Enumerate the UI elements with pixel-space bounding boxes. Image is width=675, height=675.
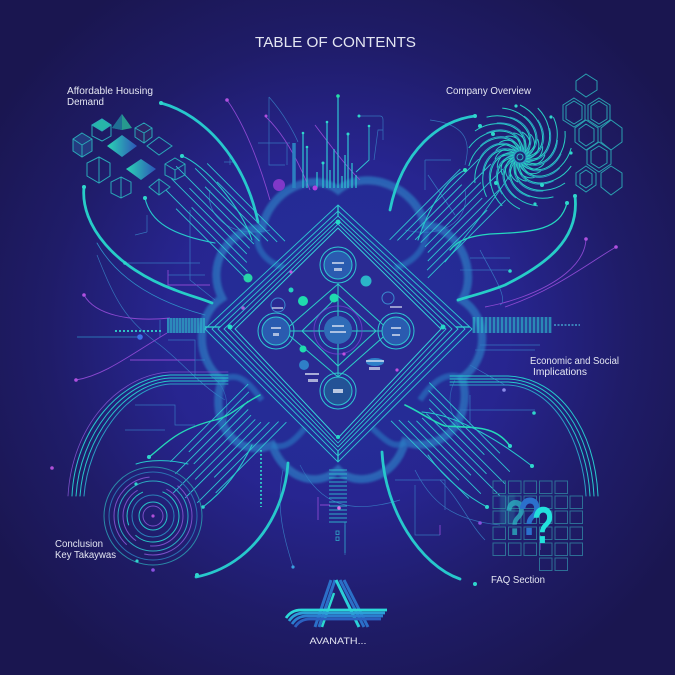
title: TABLE OF CONTENTS: [255, 34, 416, 51]
icon: faq grid with question marks: ?: [518, 486, 542, 546]
curved arms: top left: [84, 103, 258, 315]
stripes: bottom: [261, 450, 347, 553]
fine circuit lines: [97, 97, 540, 567]
text: economic and social implications: Economic and Social: [530, 356, 619, 367]
node: centre: [314, 306, 362, 354]
barcode: left: [77, 318, 205, 340]
barcode: right: [472, 317, 580, 333]
curved arms: bottom left: [68, 372, 288, 577]
text: economic and social implications: [530, 356, 619, 378]
node: left: [258, 313, 294, 349]
text: company overview: Company Overview: [446, 86, 532, 97]
icon: spiral: [464, 100, 576, 214]
text: faq section: FAQ Section: [491, 575, 545, 586]
text: economic and social implications: Implications: [533, 367, 587, 378]
glowing dots: [50, 98, 618, 586]
text: conclusion key takeaways: Key Takaywas: [55, 550, 116, 561]
text: affordable housing demand: [67, 86, 153, 108]
icon: isometric cubes and tiles: [73, 114, 185, 198]
text: affordable housing demand: Affordable Housing: [67, 86, 153, 97]
node: right: [378, 313, 414, 349]
logo: [286, 580, 387, 627]
text: affordable housing demand: Demand: [67, 97, 104, 108]
bar comb: top: [294, 94, 370, 188]
text: conclusion key takeaways: [55, 539, 116, 561]
inner network lines: [284, 284, 390, 377]
small label chips: [271, 292, 402, 382]
icon: hexagon cluster: [563, 74, 622, 195]
main diamond: [205, 205, 472, 462]
icon: faq grid with question marks: ?: [532, 495, 554, 555]
diagonal line bundles: [155, 148, 521, 514]
blue cloud loops: [202, 180, 482, 479]
logo wordmark: AVANATH...: [310, 636, 366, 647]
icon: concentric circles: [104, 467, 202, 572]
text: conclusion key takeaways: Conclusion: [55, 539, 103, 550]
curved arms: top right: [390, 116, 575, 300]
icon: faq grid with question marks: [493, 481, 582, 570]
purple traces: [76, 100, 616, 550]
icon: faq grid with question marks: ?: [505, 491, 526, 547]
curved arms: bottom right: [382, 376, 598, 579]
node: top: [320, 247, 356, 283]
tip connectors: [205, 205, 470, 462]
node: bottom: [320, 373, 356, 409]
